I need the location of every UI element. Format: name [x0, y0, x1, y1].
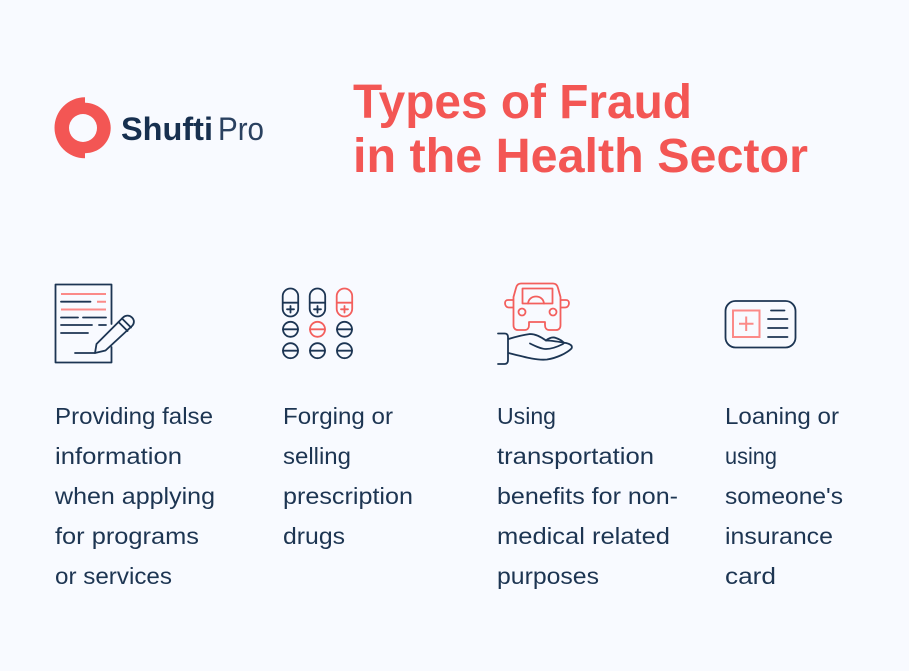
icon: insurance card — [726, 301, 796, 348]
text: loaning or using card — [725, 403, 843, 589]
text: forging or selling: prescription — [283, 483, 413, 509]
text: providing false information: when applying — [54, 483, 215, 509]
car — [514, 284, 560, 330]
icon: car over hand — [498, 284, 572, 364]
text: loaning or using card: Loaning or — [725, 403, 839, 429]
text: using transportation benefits: medical related — [497, 523, 670, 549]
text: using transportation benefits: purposes — [497, 563, 599, 589]
text: using transportation benefits: Using — [497, 403, 556, 429]
text: providing false information: information — [55, 443, 182, 469]
icon: pills — [283, 288, 352, 358]
text: providing false information: Providing false — [55, 403, 213, 429]
logo: Shufti Pro — [55, 97, 264, 158]
logo wordmark: Pro — [218, 111, 264, 147]
text: loaning or using card: insurance — [725, 523, 833, 549]
text: providing false information: for programs — [55, 523, 199, 549]
text: forging or selling: drugs — [283, 523, 345, 549]
column 3: transportation benefits — [497, 284, 678, 589]
text: forging or selling — [283, 403, 413, 549]
text: forging or selling: selling — [283, 443, 351, 469]
column 2: prescription drugs — [283, 288, 413, 549]
text: loaning or using card: someone's — [725, 483, 843, 509]
text: using transportation benefits — [497, 403, 678, 589]
text: providing false information: or services — [55, 563, 172, 589]
text: loaning or using card: card — [725, 563, 776, 589]
column 4: insurance card — [725, 301, 843, 589]
title: Types of Fraud — [353, 76, 692, 129]
text: forging or selling: Forging or — [283, 403, 393, 429]
text: using transportation benefits: benefits for non- — [497, 483, 678, 509]
column 1: false information — [54, 284, 215, 589]
icon: document and pen — [56, 284, 134, 362]
text: using transportation benefits: transportation — [497, 443, 654, 469]
text: providing false information — [54, 403, 215, 589]
logo wordmark: Shufti — [121, 111, 213, 147]
text: loaning or using card: using — [725, 443, 777, 469]
icon: logo mark — [55, 97, 111, 158]
title — [353, 76, 808, 183]
hand — [498, 334, 508, 364]
logo wordmark — [121, 111, 264, 147]
title: in the Health Sector — [353, 130, 808, 183]
